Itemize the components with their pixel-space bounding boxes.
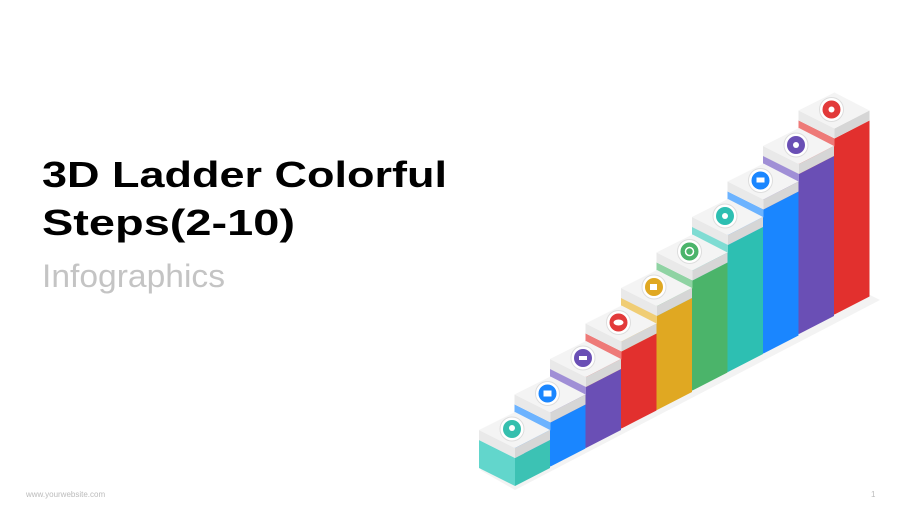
step 7 bbox=[692, 199, 763, 372]
step 5 bbox=[621, 270, 692, 410]
title bbox=[42, 154, 447, 243]
ladder chart bbox=[479, 92, 870, 486]
step 3 bbox=[550, 341, 621, 448]
title: Steps(2-10) bbox=[42, 202, 295, 243]
footer: website: www.yourwebsite.com bbox=[25, 490, 105, 499]
title: 3D Ladder Colorful bbox=[42, 154, 447, 195]
step 2 bbox=[514, 376, 586, 466]
step 9 bbox=[763, 128, 834, 334]
step 1 bbox=[479, 412, 550, 486]
step 10 bbox=[798, 92, 870, 314]
subtitle: Infographics bbox=[42, 258, 225, 294]
step 6 bbox=[656, 234, 728, 390]
step 8 bbox=[728, 164, 798, 354]
ground shadow bbox=[480, 290, 880, 490]
step 4 bbox=[586, 306, 656, 428]
footer: page number: 1 bbox=[871, 490, 876, 499]
